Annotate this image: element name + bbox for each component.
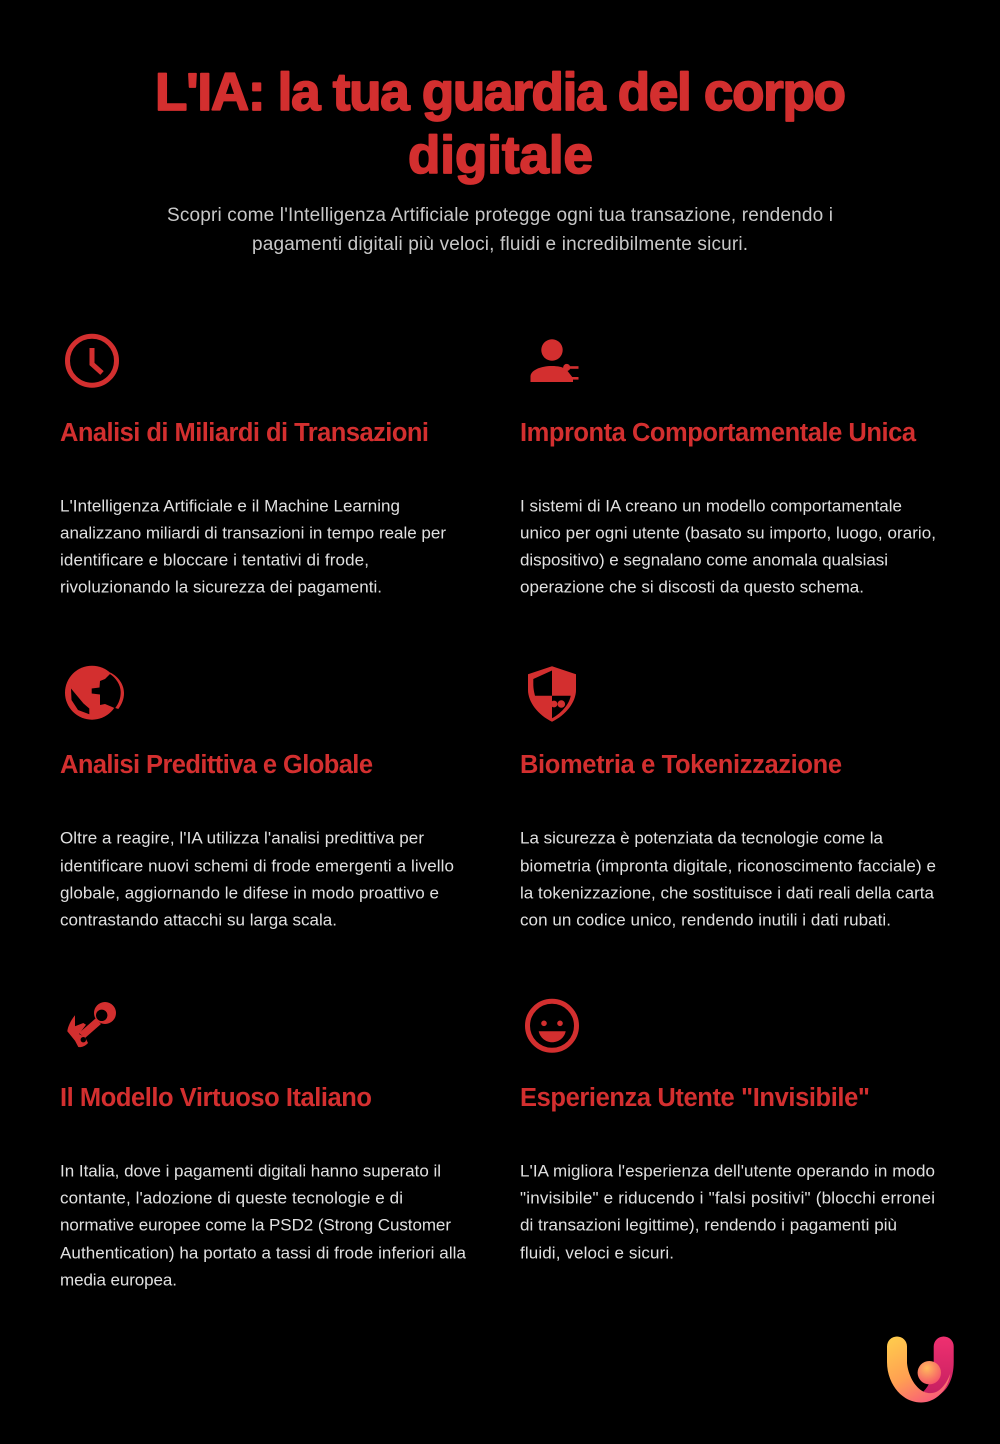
panel: impronta comportamentale: [520, 339, 936, 596]
body text: modello virtuoso: media europea.: [60, 1270, 177, 1290]
body text: modello virtuoso: In Italia, dove i pagamenti digitali hanno superato il: [60, 1162, 441, 1180]
icon: user with signal: [530, 339, 578, 382]
heading: analisi di miliardi: Analisi di Miliardi di Transazioni: [60, 419, 429, 447]
icon: shield: [528, 666, 576, 722]
logo: [887, 1337, 954, 1402]
body text: analisi predittiva: Oltre a reagire, l'IA utilizza l'analisi predittiva per: [60, 828, 424, 848]
body text: esperienza utente: [520, 1162, 935, 1262]
panel: biometria: [520, 666, 936, 930]
heading: esperienza utente: Esperienza Utente "Invisibile": [520, 1084, 870, 1112]
heading: biometria: Biometria e Tokenizzazione: [520, 751, 842, 779]
title: L'IA: la tua guardia del corpo: [155, 63, 846, 122]
heading: analisi predittiva: Analisi Predittiva e Globale: [60, 751, 373, 779]
body text: analisi di miliardi: L'Intelligenza Artificiale e il Machine Learning: [60, 496, 400, 516]
heading: impronta: Impronta Comportamentale Unica: [520, 419, 917, 447]
panel: modello virtuoso italiano: [60, 1002, 467, 1290]
body text: analisi di miliardi: identificare e bloccare i tentativi di frode,: [60, 550, 369, 570]
subtitle: Scopri come l'Intelligenza Artificiale protegge ogni tua transazione, rendendo i: [167, 205, 833, 226]
body text: analisi di miliardi: rivoluzionando la sicurezza dei pagamenti.: [60, 578, 382, 596]
panel: esperienza utente: [520, 1001, 935, 1262]
body text: impronta: I sistemi di IA creano un modello comportamentale: [520, 496, 902, 516]
body text: impronta: [520, 496, 936, 596]
body text: analisi predittiva: identificare nuovi schemi di frode emergenti a livello: [60, 856, 454, 876]
body text: analisi di miliardi: [60, 496, 446, 596]
icon: clock: [68, 336, 116, 385]
title: digitale: [408, 126, 593, 185]
body text: biometria: con un codice unico, rendendo inutili i dati rubati.: [520, 910, 891, 930]
icon: smiley: [528, 1001, 576, 1050]
body text: modello virtuoso: contante, l'adozione di queste tecnologie e di: [60, 1188, 403, 1208]
body text: analisi predittiva: globale, aggiornando le difese in modo proattivo e: [60, 884, 439, 902]
body text: impronta: operazione che si discosti da questo schema.: [520, 578, 864, 596]
subtitle: pagamenti digitali più veloci, fluidi e incredibilmente sicuri.: [252, 234, 748, 255]
icon: globe: [65, 666, 125, 720]
body text: esperienza utente: L'IA migliora l'esperienza dell'utente operando in modo: [520, 1162, 935, 1180]
subtitle: [167, 205, 833, 255]
body text: analisi di miliardi: analizzano miliardi di transazioni in tempo reale per: [60, 524, 446, 542]
body text: analisi predittiva: [60, 828, 454, 930]
heading: modello virtuoso: Il Modello Virtuoso Italiano: [60, 1084, 372, 1112]
body text: modello virtuoso: [60, 1162, 467, 1290]
icon: tool: [67, 1002, 116, 1047]
body text: impronta: dispositivo) e segnalano come anomala qualsiasi: [520, 550, 888, 570]
body text: biometria: la tokenizzazione, che sostituisce i dati reali della carta: [520, 884, 935, 902]
panel: analisi predittiva: [60, 666, 454, 930]
body text: analisi predittiva: contrastando attacchi su larga scala.: [60, 910, 337, 930]
body text: esperienza utente: "invisibile" e riducendo i "falsi positivi" (blocchi erronei: [520, 1188, 935, 1208]
body text: biometria: biometria (impronta digitale, riconoscimento facciale) e: [520, 856, 936, 876]
body text: esperienza utente: fluidi, veloci e sicuri.: [520, 1244, 674, 1262]
body text: esperienza utente: di transazioni legittime), rendendo i pagamenti più: [520, 1216, 897, 1234]
panel: analisi di miliardi di transazioni: [60, 336, 446, 596]
body text: modello virtuoso: Authentication) ha portato a tassi di frode inferiori alla: [60, 1244, 467, 1262]
body text: biometria: [520, 828, 936, 930]
body text: biometria: La sicurezza è potenziata da tecnologie come la: [520, 828, 884, 848]
title: [155, 63, 846, 185]
body text: modello virtuoso: normative europee come la PSD2 (Strong Customer: [60, 1216, 451, 1234]
body text: impronta: unico per ogni utente (basato su importo, luogo, orario,: [520, 524, 936, 542]
